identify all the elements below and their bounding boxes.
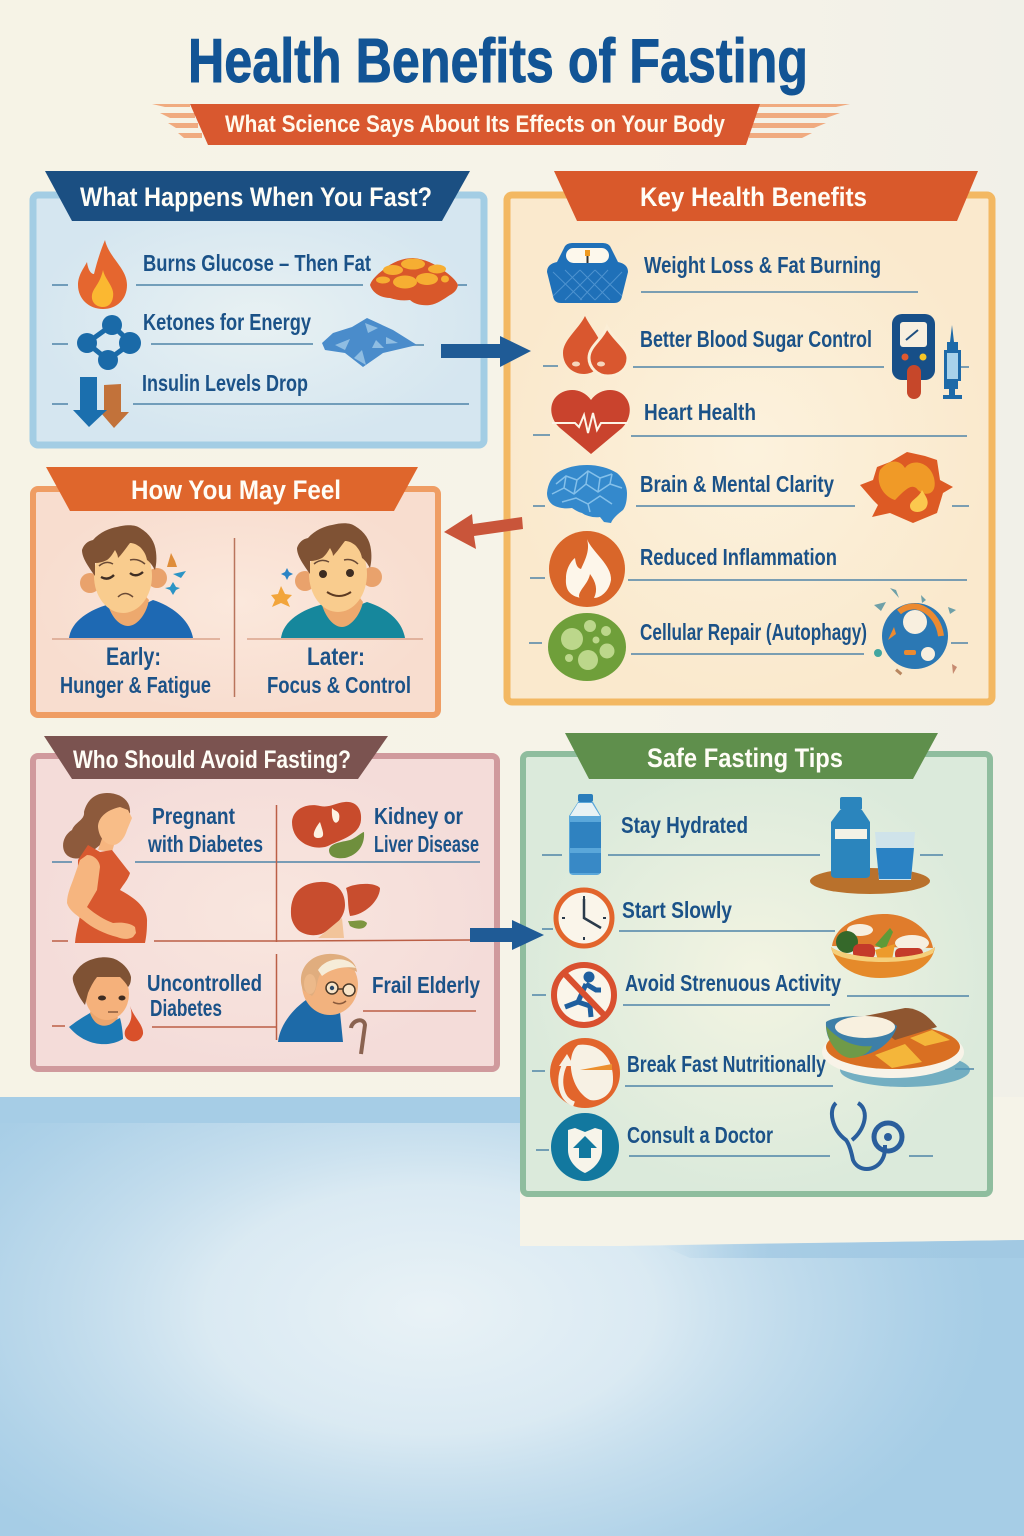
heading: key health benefits xyxy=(554,171,978,221)
text: kidney or liver disease: Liver Disease xyxy=(374,831,479,857)
heading: what happens: What Happens When You Fast? xyxy=(80,182,432,212)
text: early: Early: xyxy=(106,643,161,671)
text: uncontrolled diabetes xyxy=(147,970,262,1021)
item: burns glucose: Burns Glucose – Then Fat xyxy=(143,250,371,276)
item: cellular repair: Cellular Repair (Autophagy) xyxy=(640,619,867,645)
text: pregnant: with Diabetes xyxy=(147,831,263,857)
item: consult a doctor: Consult a Doctor xyxy=(627,1122,773,1148)
heading: key health benefits: Key Health Benefits xyxy=(640,182,867,212)
item: break fast nutritionally: Break Fast Nutritionally xyxy=(627,1051,826,1077)
figure: sad boy xyxy=(69,957,143,1044)
text: kidney or liver disease: Kidney or xyxy=(374,803,463,829)
item: insulin xyxy=(52,370,469,428)
panel: key health benefits xyxy=(507,171,992,702)
panel: how you may feel xyxy=(33,467,438,715)
text: later: Focus & Control xyxy=(267,672,411,698)
item: blood sugar: Better Blood Sugar Control xyxy=(640,326,872,352)
item: break fast nutritionally xyxy=(532,1008,974,1108)
heading: who should avoid: Who Should Avoid Fasting? xyxy=(73,746,351,774)
item: stay hydrated: Stay Hydrated xyxy=(621,812,748,838)
item: avoid strenuous xyxy=(532,965,969,1025)
item: brain: Brain & Mental Clarity xyxy=(640,471,834,497)
item: start slowly: Start Slowly xyxy=(622,897,732,923)
heading: what happens xyxy=(45,171,470,221)
panel: who should avoid fasting xyxy=(33,736,497,1069)
text: pregnant: Pregnant xyxy=(152,803,235,829)
item: ketones: Ketones for Energy xyxy=(143,309,311,335)
text: uncontrolled diabetes: Uncontrolled xyxy=(147,970,262,996)
figure: kidney xyxy=(292,802,364,858)
text: kidney or liver disease xyxy=(374,803,479,857)
text: later: Later: xyxy=(307,643,365,671)
item: consult a doctor xyxy=(536,1103,933,1181)
item: ketones xyxy=(52,309,424,370)
heading: safe fasting tips xyxy=(565,733,938,779)
figure: early tired boy xyxy=(52,525,423,639)
arrow: blue to benefits xyxy=(441,336,531,367)
item: stay hydrated xyxy=(542,794,943,894)
heading: who should avoid xyxy=(44,736,388,779)
arrow: red back to feel xyxy=(444,514,523,549)
text: early xyxy=(60,643,211,698)
figure: frail elderly xyxy=(278,954,365,1054)
subtitle ribbon xyxy=(152,104,850,145)
item: blood sugar xyxy=(543,314,969,399)
item: heart health xyxy=(533,390,967,454)
text: pregnant xyxy=(147,803,263,857)
heading: how you may feel xyxy=(46,467,418,511)
title: Health Benefits of Fasting xyxy=(188,27,808,96)
item: brain xyxy=(533,452,969,523)
text: frail elderly: Frail Elderly xyxy=(372,972,480,998)
item: weight loss: Weight Loss & Fat Burning xyxy=(644,252,881,278)
text: uncontrolled diabetes: Diabetes xyxy=(150,995,222,1021)
item: avoid strenuous: Avoid Strenuous Activity xyxy=(625,970,841,996)
item: cellular repair xyxy=(529,588,968,681)
subtitle ribbon: What Science Says About Its Effects on Your Body xyxy=(225,111,726,138)
item: insulin: Insulin Levels Drop xyxy=(142,370,308,396)
text: early: Hunger & Fatigue xyxy=(60,672,211,698)
text: later xyxy=(267,643,411,698)
item: start slowly xyxy=(542,890,935,978)
heading: safe fasting tips: Safe Fasting Tips xyxy=(647,743,843,773)
item: burns glucose xyxy=(52,240,467,309)
arrow: blue to safe tips xyxy=(470,920,544,950)
figure: liver xyxy=(291,882,380,938)
panel: what happens when you fast xyxy=(33,171,484,445)
figure: pregnant woman xyxy=(63,793,147,943)
item: heart health: Heart Health xyxy=(644,399,756,425)
figure: later happy boy xyxy=(271,523,405,638)
panel: safe fasting tips xyxy=(523,733,990,1194)
item: inflammation: Reduced Inflammation xyxy=(640,544,837,570)
item: inflammation xyxy=(530,531,967,607)
heading: how you may feel: How You May Feel xyxy=(131,475,341,505)
item: weight loss xyxy=(547,243,918,303)
